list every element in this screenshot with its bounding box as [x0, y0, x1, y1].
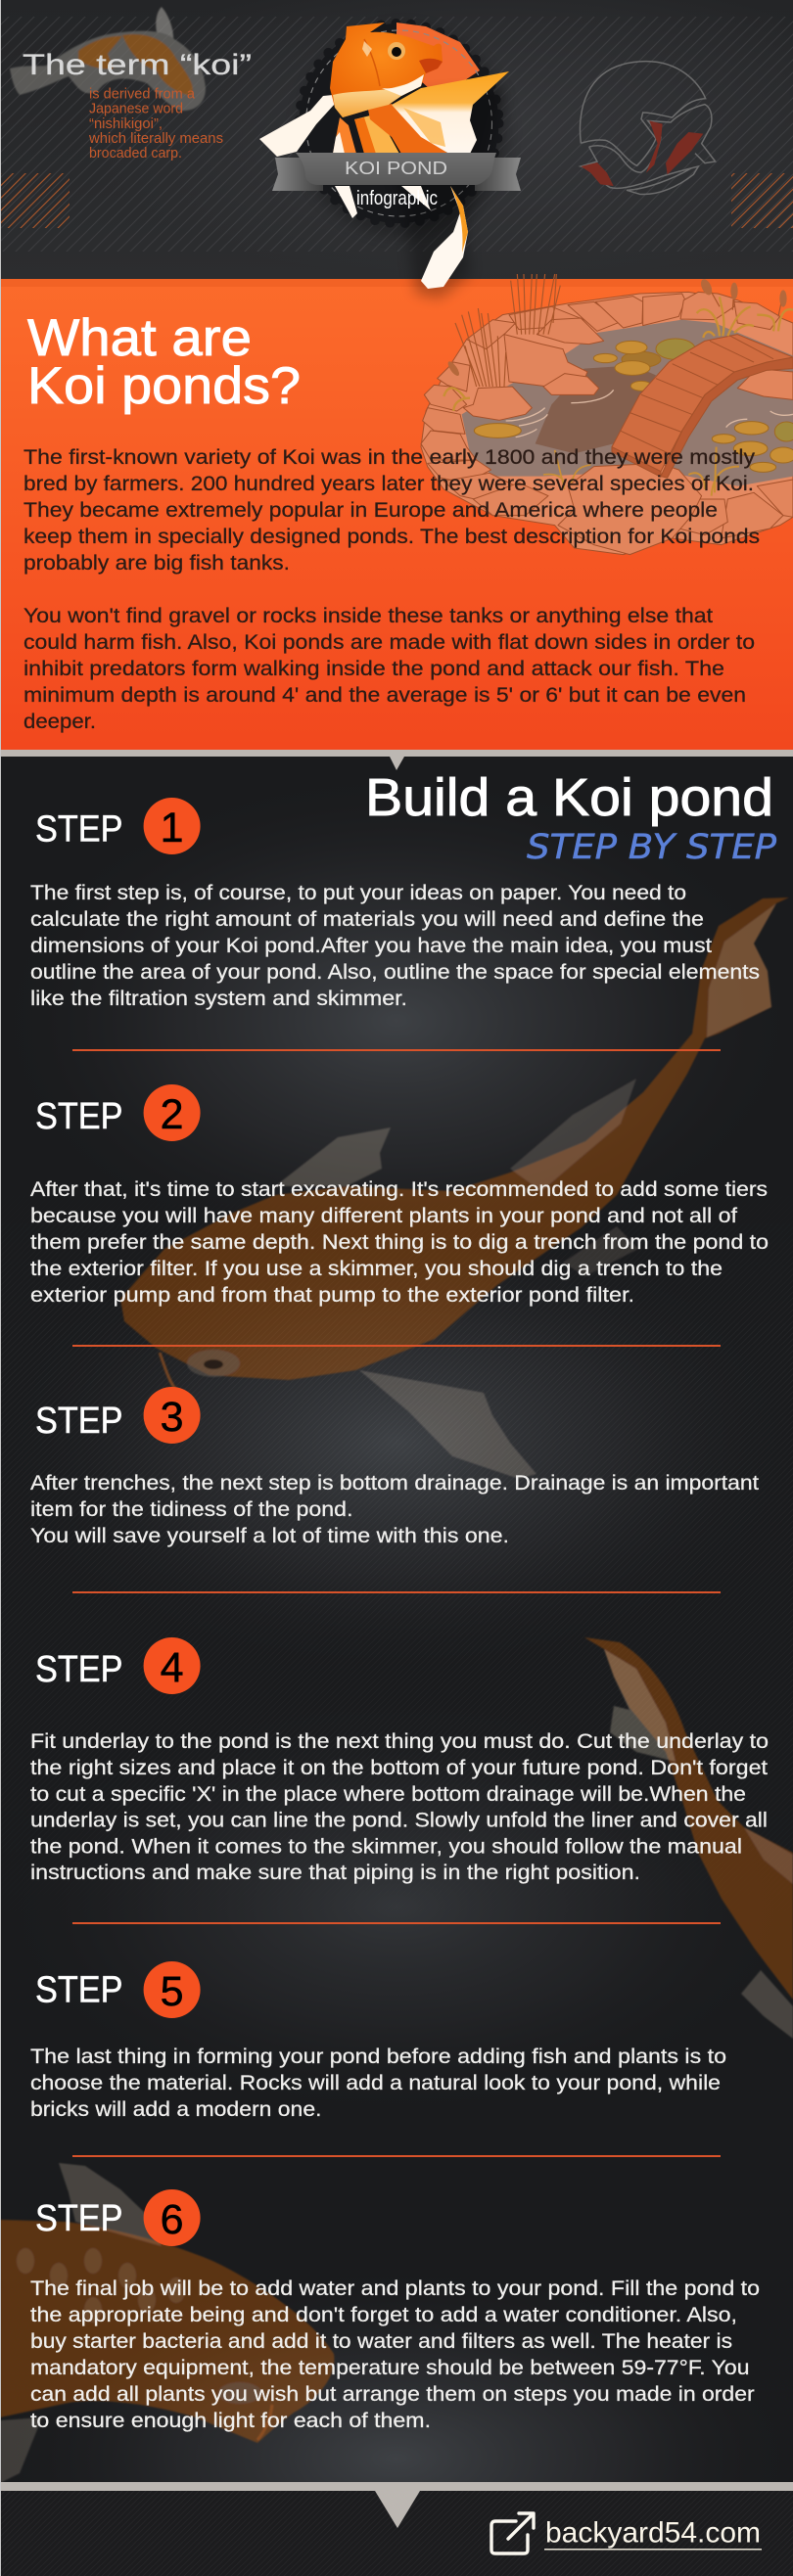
heading: what are koi ponds: Koi ponds?: [27, 357, 301, 415]
step 2 badge: 2: [161, 1091, 184, 1138]
step 5 badge: STEP: [35, 1969, 123, 2010]
step 3 badge: 3: [161, 1394, 184, 1441]
header panel: [0, 0, 793, 284]
orange fish with ribbon: [259, 23, 521, 299]
lower fin strips: [335, 186, 357, 218]
ribbon wings: [272, 158, 521, 191]
text block: koi ponds intro: probably are big fish tanks.: [23, 552, 290, 575]
step 4 text: to cut a specific 'X' in the place where bottom drainage will be.When the: [30, 1783, 746, 1806]
background koi 2: [584, 1637, 793, 2039]
orange fin base: [368, 104, 448, 154]
step 4 text: instructions and make sure that piping is in the right position.: [30, 1862, 640, 1884]
tail strand: [421, 186, 468, 289]
text block: koi ponds intro: They became extremely popular in Europe and America where people: [23, 499, 718, 522]
footer panel: [0, 2482, 793, 2576]
pond water: [462, 320, 793, 486]
ventral fin left: [333, 117, 356, 154]
panel: what are koi ponds: [0, 274, 793, 750]
left edge line: [0, 0, 1, 2576]
reeds and plants: [443, 274, 793, 496]
step 6 text: the appropriate being and don't forget to add a water conditioner. Also,: [30, 2304, 737, 2326]
step 2 text: because you will have many different plants in your pond and not all of: [30, 1205, 737, 1227]
icon: external link: [491, 2513, 534, 2553]
step 6 badge: [35, 2189, 201, 2246]
step 6 text: buy starter bacteria and add it to water and filters as well. The heater is: [30, 2330, 732, 2353]
infographic label: infographic: [356, 187, 438, 209]
text block: koi ponds intro: inhibit predators form walking inside the pond and attack our fish. The: [23, 658, 724, 680]
step 1 badge: [35, 798, 201, 854]
step 5 badge: [35, 1961, 201, 2018]
pond stones: [421, 292, 793, 555]
water ripples: [506, 390, 793, 437]
subheading: step by step: STEP BY STEP: [527, 828, 777, 867]
step 5 text: [30, 2046, 726, 2121]
step 2 badge: [35, 1084, 201, 1141]
step 6 text: to ensure enough light for each of them.: [30, 2410, 431, 2432]
orange definition text: brocaded carp.: [89, 145, 182, 161]
heading: the term koi: The term “koi”: [23, 49, 252, 81]
text block: koi ponds intro: You won't find gravel or rocks inside these tanks or anything else that: [23, 605, 713, 627]
right pectoral fin: [392, 71, 509, 154]
central scalloped badge: [298, 23, 509, 237]
step 4 text: underlay is set, you can line the pond. Slowly unfold the liner and cover all: [30, 1809, 768, 1832]
step 2 text: After that, it's time to start excavating. It's recommended to add some tiers: [30, 1178, 768, 1201]
heading: what are koi ponds: [27, 309, 301, 415]
fish body: [330, 23, 443, 117]
step 5 text: The last thing in forming your pond before adding fish and plants is to: [30, 2046, 726, 2068]
step 6 text: [30, 2277, 760, 2432]
text block: koi ponds intro: keep them in specially designed ponds. The best description for Koi ponds: [23, 526, 760, 548]
heading: what are koi ponds: What are: [27, 309, 252, 367]
step 3 text: [30, 1472, 759, 1547]
step 4 badge: [35, 1637, 201, 1694]
step 2 text: them prefer the same depth. Next thing is to dig a trench from the pond to: [30, 1231, 769, 1254]
orange definition text: [88, 86, 223, 161]
text block: koi ponds intro: minimum depth is around 4' and the average is 5' or 6' but it can be even: [23, 684, 746, 707]
step 2 text: exterior pump and from that pump to the exterior pond filter.: [30, 1284, 634, 1307]
step 4 badge: 4: [161, 1644, 184, 1691]
step 3 text: item for the tidiness of the pond.: [30, 1498, 352, 1521]
step 4 badge: STEP: [35, 1649, 123, 1690]
pond stone ring: [421, 292, 793, 555]
step 3 text: You will save yourself a lot of time with this one.: [30, 1525, 509, 1547]
step 6 badge: 6: [161, 2196, 184, 2243]
website link: backyard54.com: [545, 2517, 761, 2549]
text block: koi ponds intro: [23, 446, 760, 733]
text block: koi ponds intro: deeper.: [23, 711, 96, 733]
fish belly: [333, 80, 421, 117]
text block: koi ponds intro: The first-known variety of Koi was in the early 1800 and they were mostly: [23, 446, 756, 469]
step 4 text: [30, 1730, 769, 1884]
step 4 text: Fit underlay to the pond is the next thing you must do. Cut the underlay to: [30, 1730, 769, 1753]
step 3 text: After trenches, the next step is bottom drainage. Drainage is an important: [30, 1472, 759, 1495]
orange definition text: Japanese word: [89, 100, 183, 117]
step 3 badge: [35, 1387, 201, 1444]
footer divider with pointer: [0, 2482, 793, 2528]
step 2 text: the exterior filter. If you use a skimmer, you should dig a trench to the: [30, 1258, 723, 1280]
step 2 text: [30, 1178, 769, 1307]
step 1 text: outline the area of your pond. Also, outline the space for special elements: [30, 961, 760, 984]
panel: build a koi pond steps: [0, 750, 793, 2576]
ventral fin centre: [354, 115, 399, 154]
ribbon label: KOI POND: [345, 158, 447, 178]
pond water shadow: [536, 365, 656, 453]
step 5 badge: 5: [161, 1968, 184, 2015]
step 1 text: The first step is, of course, to put your ideas on paper. You need to: [30, 882, 686, 904]
step 4 text: the pond. When it comes to the skimmer, you should follow the manual: [30, 1836, 742, 1858]
step 1 badge: 1: [161, 805, 184, 851]
background koi 1: [120, 897, 789, 1479]
decorative koi top left: [10, 7, 206, 111]
step 1 text: calculate the right amount of materials you will need and define the: [30, 908, 704, 931]
orange definition text: “nishikigoi”,: [89, 115, 163, 132]
grey divider with pointer under orange panel: [0, 750, 793, 770]
step 1 text: dimensions of your Koi pond.After you have the main idea, you must: [30, 935, 712, 957]
step 6 text: can add all plants you wish but arrange them on steps you made in order: [30, 2383, 755, 2406]
step 4 text: the right sizes and place it on the bottom of your future pond. Don't forget: [30, 1757, 768, 1779]
lily pads: [474, 339, 793, 472]
text block: koi ponds intro: could harm fish. Also, Koi ponds are made with flat down sides in order to: [23, 631, 755, 654]
background koi 3: [0, 2163, 334, 2483]
heading: build a koi pond: Build a Koi pond: [365, 768, 773, 827]
cattail heads: [446, 278, 787, 378]
step 3 badge: STEP: [35, 1401, 123, 1442]
step 5 text: choose the material. Rocks will add a natural look to your pond, while: [30, 2072, 721, 2094]
orange hatch right: [731, 173, 793, 228]
ribbon main: [296, 153, 496, 185]
orange definition text: is derived from a: [89, 86, 196, 102]
text block: koi ponds intro: bred by farmers. 200 hundred years later they were several species of Koi.: [23, 473, 754, 495]
orange definition text: which literally means: [88, 130, 223, 147]
step 1 badge: STEP: [35, 808, 123, 850]
step 5 text: bricks will add a modern one.: [30, 2098, 321, 2121]
wooden bridge: [612, 335, 793, 478]
pond illustration: [421, 274, 793, 555]
step 6 badge: STEP: [35, 2198, 123, 2239]
fish gill and mouth: [362, 39, 443, 86]
step 2 badge: STEP: [35, 1096, 123, 1137]
orange hatch left: [0, 173, 70, 228]
step 1 text: like the filtration system and skimmer.: [30, 988, 407, 1010]
step 6 text: The final job will be to add water and plants to your pond. Fill the pond to: [30, 2277, 760, 2300]
fish eye: [388, 42, 405, 60]
left fin: [259, 93, 352, 157]
step 1 text: [30, 882, 760, 1010]
koi outline icon right: [580, 62, 716, 194]
step 6 text: mandatory equipment, the temperature should be between 59-77°F. You: [30, 2357, 750, 2379]
